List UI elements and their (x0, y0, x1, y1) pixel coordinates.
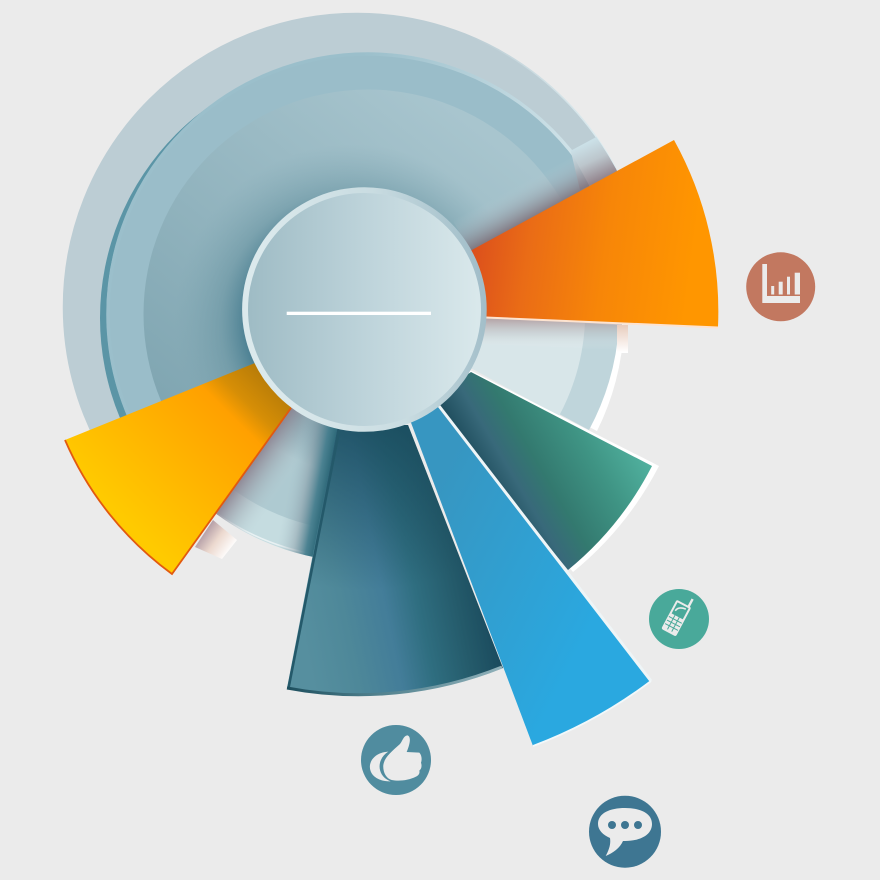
outer band (190, 310, 364, 562)
highlight arc (216, 513, 318, 555)
middle ring (106, 52, 590, 415)
sector: orange (440, 140, 718, 328)
shadow of teal sector (281, 422, 338, 557)
dark crescent edge (100, 108, 206, 418)
fading tab under yellow sector (195, 520, 237, 559)
sector: green (430, 369, 659, 572)
icon: speech bubble (589, 796, 661, 868)
green fill (430, 372, 652, 570)
top darkening (287, 425, 503, 695)
sector: dark teal (287, 425, 503, 695)
hub divider line (287, 312, 431, 315)
sector: yellow (65, 363, 320, 574)
pale lower edge (486, 318, 718, 328)
base disk: lower right sector (364, 310, 628, 431)
tab above orange sector (572, 137, 617, 190)
base disk: lower left sector (195, 408, 338, 559)
shadow around hub (201, 162, 470, 378)
sector: blue (410, 406, 651, 746)
icon: thumbs up (361, 725, 431, 795)
hub rim (242, 187, 487, 432)
shadow of orange sector (458, 166, 590, 250)
pale right edge (439, 406, 651, 681)
pale arc edge (533, 681, 651, 746)
shadow under orange sector (480, 318, 622, 350)
red-orange edge (65, 408, 291, 574)
blue-grey band (364, 310, 619, 430)
base disk: upper rings (62, 12, 618, 430)
tab under orange sector (617, 325, 628, 353)
pale inner area (364, 310, 585, 416)
hub face (248, 193, 481, 426)
inner area (200, 310, 364, 531)
outer band with white edge (364, 310, 624, 431)
shadow of yellow sector (216, 408, 316, 531)
left border (288, 431, 339, 688)
icon: mobile phone (649, 589, 709, 649)
icon: bar chart (746, 252, 815, 321)
central hub (242, 187, 487, 432)
pale left rim line (106, 258, 112, 328)
inner ring (144, 90, 550, 401)
outer ring (62, 12, 618, 430)
bottom rim (287, 667, 502, 695)
white backing edge (440, 369, 659, 572)
